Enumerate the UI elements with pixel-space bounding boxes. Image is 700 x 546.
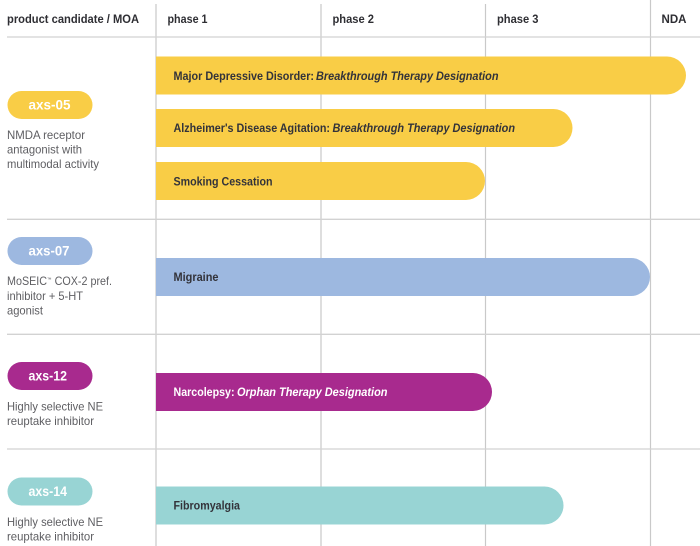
bar: Narcolepsy: Narcolepsy: <box>174 387 234 399</box>
pill: axs-05: axs-05 <box>28 98 71 112</box>
header: phase 2: phase 2 <box>332 14 374 26</box>
description: axs-12: reuptake inhibitor <box>7 414 94 428</box>
bar: Fibromyalgia: Fibromyalgia <box>174 500 241 512</box>
description: axs-05: multimodal activity <box>7 157 99 171</box>
bar: Alzheimer's Disease Agitation <box>156 109 572 147</box>
pill: axs-14: axs-14 <box>28 484 67 499</box>
description: axs-12 <box>7 400 103 428</box>
description: axs-05: NMDA receptor <box>7 128 85 142</box>
header row <box>7 14 686 26</box>
description: axs-12: Highly selective NE <box>7 400 103 414</box>
pill: axs-14 <box>8 478 92 506</box>
description: axs-07: ™ <box>47 277 52 283</box>
pill: axs-12: axs-12 <box>28 368 67 384</box>
description: axs-07: agonist <box>7 304 44 318</box>
bar: Major Depressive Disorder: Breakthrough Therapy Designation <box>316 71 498 83</box>
header: phase 1: phase 1 <box>168 14 208 26</box>
description: axs-07: inhibitor + 5-HT <box>7 289 83 303</box>
bar: Alzheimer's Disease Agitation: Breakthrough Therapy Designation <box>332 123 515 135</box>
pill: axs-07: axs-07 <box>28 244 70 258</box>
bar: Migraine: Migraine <box>174 272 218 284</box>
description: axs-07: COX-2 pref. <box>52 274 112 288</box>
panel: axs-07 <box>7 237 650 318</box>
description: axs-05 <box>7 128 99 171</box>
bar: Smoking Cessation <box>156 162 485 200</box>
panel: axs-14 <box>7 478 564 544</box>
bar: Smoking Cessation: Smoking Cessation <box>174 176 272 188</box>
bar: Major Depressive Disorder <box>156 56 686 94</box>
panel: axs-12 <box>7 362 492 428</box>
panel: axs-05 <box>7 56 686 200</box>
header: NDA: NDA <box>662 14 686 26</box>
description: axs-07: MoSEIC <box>7 274 51 288</box>
header: product candidate / MOA: product candidate / MOA <box>7 14 139 26</box>
bar: Fibromyalgia <box>156 486 564 524</box>
bar: Narcolepsy: Orphan Therapy Designation <box>237 387 388 399</box>
description: axs-07 <box>7 274 112 318</box>
description: axs-14: reuptake inhibitor <box>7 530 94 544</box>
bar: Major Depressive Disorder: Major Depressive Disorder: <box>174 71 314 83</box>
bar: Alzheimer's Disease Agitation: Alzheimer's Disease Agitation: <box>174 123 330 135</box>
bar: Migraine <box>156 258 650 296</box>
pill: axs-12 <box>8 362 92 390</box>
description: axs-14: Highly selective NE <box>7 515 103 529</box>
description: axs-05: antagonist with <box>7 142 82 156</box>
bar: Narcolepsy <box>156 373 492 411</box>
pill: axs-05 <box>8 91 92 119</box>
description: axs-14 <box>7 515 103 544</box>
header: phase 3: phase 3 <box>497 14 538 26</box>
pill: axs-07 <box>8 237 92 265</box>
